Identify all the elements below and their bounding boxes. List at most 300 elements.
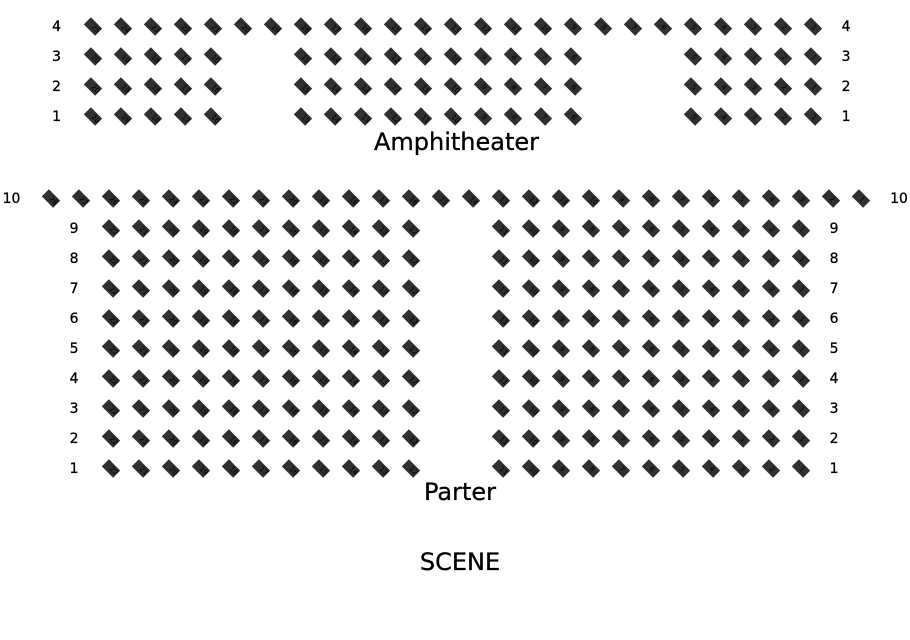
parter row 8 seats: 5 <box>677 255 686 264</box>
amphitheater row 2 seats: 7 <box>539 83 548 92</box>
parter row 7 seats: 19 <box>197 285 209 297</box>
parter row 7 seats: 12 <box>407 285 419 297</box>
parter row 2 seats: 1 <box>797 435 806 444</box>
amphitheater row 3 seats: 15 <box>299 53 311 65</box>
parter row 10 seats: 12 <box>527 195 539 207</box>
parter row 9 seats: 18 <box>227 225 239 237</box>
amphitheater row 1 seats <box>84 107 822 126</box>
parter row 1 seats: 6 <box>647 465 657 474</box>
amphitheater row 4 seats: 21 <box>209 23 221 35</box>
parter row 1 seats: 22 <box>107 465 119 477</box>
parter row 10 seats: 2 <box>827 195 836 204</box>
parter row 8 seats: 4 <box>707 255 717 264</box>
amphitheater row 1 seats: 13 <box>359 113 371 125</box>
amphitheater row 3 seats: 1 <box>809 53 818 62</box>
amphitheater row 2 seats: 20 <box>89 83 101 95</box>
parter row 10 seats: 21 <box>257 195 269 207</box>
heading: Amphitheater: Amphitheater <box>374 128 539 156</box>
amphitheater row 3 seats: 13 <box>359 53 371 65</box>
parter row 6 seats: 16 <box>287 315 300 327</box>
amphitheater row 4 seats: 4 <box>719 23 729 32</box>
parter row 6 seats: 3 <box>737 315 746 324</box>
parter row 10 seats: 24 <box>167 195 180 207</box>
parter row 7 seats: 18 <box>227 285 239 297</box>
parter row 3 seats: 14 <box>347 405 360 417</box>
parter row 4 seats: 13 <box>377 375 389 387</box>
section: amphitheater <box>84 17 822 126</box>
parter row 5 seats: 15 <box>317 345 329 357</box>
parter row 9 seats: 19 <box>197 225 209 237</box>
parter row 8 seats <box>102 249 810 268</box>
parter row 9 seats: 5 <box>677 225 686 234</box>
amphitheater row 1 seats: 1 <box>809 113 818 122</box>
amphitheater row 4 seats: 14 <box>419 23 432 35</box>
parter row 10 seats: 28 <box>47 195 59 207</box>
parter row 9 seats: 3 <box>737 225 746 234</box>
parter row 4 seats: 7 <box>617 375 626 384</box>
parter row 4 seats: 11 <box>497 375 509 387</box>
parter row 2 seats: 13 <box>377 435 389 447</box>
parter row 10 seats: 3 <box>797 195 806 204</box>
parter row 5 seats: 19 <box>197 345 209 357</box>
parter row 10 seats: 20 <box>287 195 299 207</box>
parter row 4 seats: 21 <box>137 375 149 387</box>
amphitheater row 3 seats: 6 <box>569 53 579 62</box>
parter row 9 seats: 17 <box>257 225 269 237</box>
parter row 1 seats: 11 <box>497 465 509 477</box>
parter row 5 seats: 7 <box>617 345 626 354</box>
parter row 7 seats: 4 <box>707 285 717 294</box>
parter row labels: 10 <box>3 191 20 207</box>
parter row 6 seats: 1 <box>797 315 806 324</box>
amphitheater row 3 seats <box>84 47 822 66</box>
amphitheater row 2 seats: 16 <box>209 83 222 95</box>
amphitheater row 3 seats: 2 <box>779 53 788 62</box>
parter row 4 seats: 16 <box>287 375 300 387</box>
parter row 2 seats: 6 <box>647 435 657 444</box>
parter row 1 seats: 4 <box>707 465 717 474</box>
parter row 7 seats: 22 <box>107 285 119 297</box>
parter row 2 seats: 14 <box>347 435 360 447</box>
amphitheater row 1 seats: 19 <box>119 113 131 125</box>
parter row 1 seats: 21 <box>137 465 149 477</box>
parter row 6 seats: 22 <box>107 315 119 327</box>
amphitheater row 4 seats: 22 <box>179 23 191 35</box>
parter row 3 seats: 1 <box>797 405 806 414</box>
parter row 3 seats: 15 <box>317 405 329 417</box>
parter row 4 seats <box>102 369 810 388</box>
amphitheater row 2 seats: 18 <box>149 83 161 95</box>
parter row 1 seats: 10 <box>527 465 539 477</box>
parter row 8 seats: 20 <box>167 255 179 267</box>
amphitheater row 3 seats: 11 <box>419 53 431 65</box>
parter row 5 seats: 22 <box>107 345 119 357</box>
parter row 10 seats: 15 <box>437 195 449 207</box>
parter row 4 seats: 18 <box>227 375 239 387</box>
parter row 8 seats: 19 <box>197 255 209 267</box>
parter row 6 seats: 19 <box>197 315 209 327</box>
parter row 6 seats: 17 <box>257 315 269 327</box>
parter row 3 seats: 18 <box>227 405 239 417</box>
parter row 8 seats: 6 <box>647 255 657 264</box>
amphitheater row 1 seats: 8 <box>509 113 518 122</box>
parter row 6 seats: 2 <box>767 315 776 324</box>
parter row 10 seats: 23 <box>197 195 209 207</box>
parter row 3 seats: 8 <box>587 405 596 414</box>
parter row 10 seats: 1 <box>857 195 866 204</box>
parter row 4 seats: 19 <box>197 375 209 387</box>
amphitheater row 1 seats: 4 <box>719 113 729 122</box>
parter row 2 seats: 21 <box>137 435 149 447</box>
parter row 5 seats: 20 <box>167 345 179 357</box>
amphitheater row 1 seats: 6 <box>569 113 579 122</box>
parter row labels: 9 <box>70 221 78 237</box>
amphitheater row 4 seats: 25 <box>89 23 101 35</box>
parter row 9 seats: 21 <box>137 225 149 237</box>
amphitheater row 1 seats: 20 <box>89 113 101 125</box>
parter row 2 seats: 18 <box>227 435 239 447</box>
parter row 1 seats: 17 <box>257 465 269 477</box>
parter row 6 seats: 21 <box>137 315 149 327</box>
parter row 7 seats: 17 <box>257 285 269 297</box>
parter row 2 seats: 5 <box>677 435 686 444</box>
amphitheater row 2 seats: 15 <box>299 83 311 95</box>
parter row 9 seats: 4 <box>707 225 717 234</box>
amphitheater row 2 seats: 1 <box>809 83 818 92</box>
parter row 1 seats: 15 <box>317 465 329 477</box>
amphitheater row 1 seats: 11 <box>419 113 431 125</box>
amphitheater row 2 seats: 17 <box>179 83 191 95</box>
parter row 1 seats: 20 <box>167 465 179 477</box>
parter row 7 seats: 21 <box>137 285 149 297</box>
parter row 8 seats: 13 <box>377 255 389 267</box>
parter row 4 seats: 12 <box>407 375 419 387</box>
parter row 5 seats: 17 <box>257 345 269 357</box>
parter row 10 seats: 14 <box>467 195 480 207</box>
parter row 1 seats: 1 <box>797 465 806 474</box>
parter row 5 seats: 13 <box>377 345 389 357</box>
amphitheater row 4 seats: 18 <box>299 23 311 35</box>
parter row 10 seats: 11 <box>557 195 569 207</box>
parter row labels: 8 <box>830 251 838 267</box>
amphitheater row 3 seats: 4 <box>719 53 729 62</box>
parter row 6 seats: 15 <box>317 315 329 327</box>
amphitheater row 1 seats: 16 <box>209 113 222 125</box>
parter row 10 seats: 8 <box>647 195 656 204</box>
parter row 7 seats: 1 <box>797 285 806 294</box>
parter row 8 seats: 2 <box>767 255 776 264</box>
parter row 2 seats: 11 <box>497 435 509 447</box>
parter row 8 seats: 9 <box>557 255 566 264</box>
parter row 8 seats: 11 <box>497 255 509 267</box>
parter row 7 seats: 16 <box>287 285 300 297</box>
amphitheater row 1 seats: 3 <box>749 113 758 122</box>
parter row 8 seats: 22 <box>107 255 119 267</box>
amphitheater row labels: 2 <box>842 79 850 95</box>
amphitheater row 1 seats: 14 <box>329 113 342 125</box>
parter row 4 seats: 17 <box>257 375 269 387</box>
parter row 10 seats: 6 <box>707 195 717 204</box>
parter row 1 seats: 2 <box>767 465 776 474</box>
amphitheater row 4 seats: 5 <box>689 23 698 32</box>
amphitheater row 3 seats: 7 <box>539 53 548 62</box>
amphitheater row 2 seats: 2 <box>779 83 788 92</box>
parter row 8 seats: 15 <box>317 255 329 267</box>
parter row 2 seats: 15 <box>317 435 329 447</box>
section: parter <box>42 189 870 478</box>
parter row 6 seats: 9 <box>557 315 566 324</box>
parter row 1 seats: 13 <box>377 465 389 477</box>
parter row labels: 7 <box>830 281 838 297</box>
parter row 9 seats: 20 <box>167 225 179 237</box>
parter row 6 seats: 20 <box>167 315 179 327</box>
parter row 10 seats: 19 <box>317 195 329 207</box>
parter row 4 seats: 20 <box>167 375 179 387</box>
parter row 4 seats: 8 <box>587 375 596 384</box>
amphitheater row 1 seats: 10 <box>449 113 461 125</box>
amphitheater row 4 seats: 23 <box>149 23 161 35</box>
parter row 5 seats: 4 <box>707 345 717 354</box>
parter row 8 seats: 21 <box>137 255 149 267</box>
amphitheater row 1 seats: 5 <box>689 113 698 122</box>
amphitheater row 4 seats: 17 <box>329 23 341 35</box>
amphitheater row labels: 1 <box>842 109 850 125</box>
parter row 10 seats: 13 <box>497 195 509 207</box>
amphitheater row 3 seats: 8 <box>509 53 518 62</box>
amphitheater row labels: 1 <box>52 109 61 125</box>
amphitheater row 2 seats: 4 <box>719 83 729 92</box>
amphitheater row 4 seats: 24 <box>119 23 132 35</box>
parter row 1 seats: 7 <box>617 465 626 474</box>
parter row 4 seats: 15 <box>317 375 329 387</box>
parter row 4 seats: 2 <box>767 375 776 384</box>
parter row 3 seats: 2 <box>767 405 776 414</box>
amphitheater row 3 seats: 5 <box>689 53 698 62</box>
parter row 1 seats: 16 <box>287 465 300 477</box>
parter row 3 seats: 13 <box>377 405 389 417</box>
amphitheater row 4 seats: 20 <box>239 23 251 35</box>
amphitheater row 3 seats: 17 <box>179 53 191 65</box>
parter row 4 seats: 14 <box>347 375 360 387</box>
parter row 4 seats: 1 <box>797 375 806 384</box>
parter row 7 seats: 15 <box>317 285 329 297</box>
amphitheater row 2 seats: 11 <box>419 83 431 95</box>
parter row 2 seats: 22 <box>107 435 119 447</box>
amphitheater row 2 seats: 10 <box>449 83 461 95</box>
amphitheater row 2 seats: 3 <box>749 83 758 92</box>
parter row 3 seats: 12 <box>407 405 419 417</box>
parter row 10 seats: 5 <box>737 195 746 204</box>
amphitheater row 4 seats: 2 <box>779 23 788 32</box>
amphitheater row 1 seats: 12 <box>389 113 401 125</box>
parter row 6 seats: 11 <box>497 315 509 327</box>
parter row 4 seats: 9 <box>557 375 566 384</box>
amphitheater row 4 seats: 7 <box>629 23 638 32</box>
parter row 10 seats: 9 <box>617 195 626 204</box>
parter row 6 seats: 6 <box>647 315 657 324</box>
amphitheater row 1 seats: 18 <box>149 113 161 125</box>
parter row 3 seats: 3 <box>737 405 746 414</box>
amphitheater row 4 seats: 8 <box>599 23 608 32</box>
parter row 6 seats: 12 <box>407 315 419 327</box>
amphitheater row 4 seats: 13 <box>449 23 461 35</box>
parter row 6 seats: 5 <box>677 315 686 324</box>
parter row 7 seats: 6 <box>647 285 657 294</box>
heading: SCENE: SCENE <box>420 548 500 576</box>
parter row 10 seats <box>42 189 870 208</box>
parter row 1 seats <box>102 459 810 478</box>
amphitheater row 2 seats: 5 <box>689 83 698 92</box>
parter row 1 seats: 12 <box>407 465 419 477</box>
parter row 9 seats: 13 <box>377 225 389 237</box>
parter row 2 seats: 19 <box>197 435 209 447</box>
parter row 2 seats: 2 <box>767 435 776 444</box>
parter row 3 seats <box>102 399 810 418</box>
parter row 10 seats: 10 <box>587 195 599 207</box>
parter row 2 seats: 9 <box>557 435 566 444</box>
parter row 7 seats: 9 <box>557 285 566 294</box>
amphitheater row 2 seats: 6 <box>569 83 579 92</box>
parter row 10 seats: 18 <box>347 195 359 207</box>
parter row 10 seats: 25 <box>137 195 149 207</box>
parter row 9 seats: 9 <box>557 225 566 234</box>
amphitheater row 2 seats: 19 <box>119 83 131 95</box>
parter row 10 seats: 16 <box>407 195 420 207</box>
parter row labels: 8 <box>70 251 78 267</box>
amphitheater row 4 seats: 11 <box>509 23 521 35</box>
amphitheater row 3 seats: 16 <box>209 53 222 65</box>
parter row labels <box>3 191 908 477</box>
parter row 10 seats: 7 <box>677 195 686 204</box>
parter row 8 seats: 17 <box>257 255 269 267</box>
amphitheater row 1 seats: 7 <box>539 113 548 122</box>
parter row 9 seats: 12 <box>407 225 419 237</box>
parter row 1 seats: 5 <box>677 465 686 474</box>
amphitheater row 2 seats: 14 <box>329 83 342 95</box>
parter row labels: 6 <box>70 311 78 327</box>
parter row 7 seats: 5 <box>677 285 686 294</box>
amphitheater row 4 seats: 3 <box>749 23 758 32</box>
parter row 1 seats: 8 <box>587 465 596 474</box>
parter row labels: 7 <box>70 281 78 297</box>
parter row 9 seats: 2 <box>767 225 776 234</box>
parter row 1 seats: 19 <box>197 465 209 477</box>
amphitheater row 3 seats: 19 <box>119 53 131 65</box>
amphitheater row labels: 4 <box>842 19 851 35</box>
parter row 1 seats: 9 <box>557 465 566 474</box>
parter row 8 seats: 3 <box>737 255 746 264</box>
parter row labels: 1 <box>830 461 838 477</box>
parter row 3 seats: 21 <box>137 405 149 417</box>
parter row labels: 5 <box>70 341 78 357</box>
parter row labels: 4 <box>830 371 839 387</box>
amphitheater row 3 seats: 20 <box>89 53 101 65</box>
parter row 7 seats: 10 <box>527 285 539 297</box>
amphitheater row 4 seats <box>84 17 822 36</box>
parter row 5 seats: 1 <box>797 345 806 354</box>
parter row 7 seats: 2 <box>767 285 776 294</box>
parter row 2 seats: 4 <box>707 435 717 444</box>
parter row 5 seats: 18 <box>227 345 239 357</box>
parter row 6 seats: 8 <box>587 315 596 324</box>
parter row 10 seats: 26 <box>107 195 120 207</box>
parter row 3 seats: 4 <box>707 405 717 414</box>
parter row 5 seats: 14 <box>347 345 360 357</box>
parter row 9 seats: 11 <box>497 225 509 237</box>
parter row 1 seats: 18 <box>227 465 239 477</box>
parter row 8 seats: 8 <box>587 255 596 264</box>
parter row 4 seats: 3 <box>737 375 746 384</box>
parter row labels: 1 <box>70 461 78 477</box>
parter row 5 seats: 10 <box>527 345 539 357</box>
amphitheater row 3 seats: 14 <box>329 53 342 65</box>
parter row labels: 9 <box>830 221 838 237</box>
parter row 9 seats: 1 <box>797 225 806 234</box>
parter row 5 seats: 9 <box>557 345 566 354</box>
parter row 2 seats: 12 <box>407 435 419 447</box>
parter row 5 seats: 3 <box>737 345 746 354</box>
parter row 10 seats: 17 <box>377 195 389 207</box>
parter row 5 seats <box>102 339 810 358</box>
parter row 2 seats: 10 <box>527 435 539 447</box>
parter row 4 seats: 5 <box>677 375 686 384</box>
parter row 7 seats: 14 <box>347 285 360 297</box>
parter row 2 seats: 20 <box>167 435 179 447</box>
parter row 10 seats: 22 <box>227 195 239 207</box>
parter row labels: 3 <box>830 401 838 417</box>
parter row 6 seats: 14 <box>347 315 360 327</box>
parter row 8 seats: 16 <box>287 255 300 267</box>
amphitheater row labels: 4 <box>52 19 61 35</box>
parter row 10 seats: 4 <box>767 195 777 204</box>
amphitheater row 3 seats: 3 <box>749 53 758 62</box>
amphitheater row labels: 2 <box>52 79 61 95</box>
parter row 9 seats: 6 <box>647 225 657 234</box>
parter row 1 seats: 3 <box>737 465 746 474</box>
parter row 5 seats: 11 <box>497 345 509 357</box>
parter row 3 seats: 19 <box>197 405 209 417</box>
amphitheater row 2 seats: 9 <box>479 83 488 92</box>
parter row 9 seats: 14 <box>347 225 360 237</box>
parter row 7 seats: 3 <box>737 285 746 294</box>
parter row 8 seats: 14 <box>347 255 360 267</box>
parter row labels: 2 <box>830 431 838 447</box>
amphitheater row 4 seats: 16 <box>359 23 372 35</box>
amphitheater row 3 seats: 12 <box>389 53 401 65</box>
parter row 4 seats: 22 <box>107 375 119 387</box>
amphitheater row 2 seats <box>84 77 822 96</box>
parter row 5 seats: 8 <box>587 345 596 354</box>
parter row 6 seats: 7 <box>617 315 626 324</box>
parter row 7 seats: 11 <box>497 285 509 297</box>
parter row 4 seats: 6 <box>647 375 657 384</box>
parter row 4 seats: 10 <box>527 375 539 387</box>
parter row 3 seats: 7 <box>617 405 626 414</box>
parter row 9 seats: 10 <box>527 225 539 237</box>
parter row 10 seats: 27 <box>77 195 89 207</box>
parter row 3 seats: 11 <box>497 405 509 417</box>
parter row 5 seats: 12 <box>407 345 419 357</box>
parter row 1 seats: 14 <box>347 465 360 477</box>
parter row 9 seats: 22 <box>107 225 119 237</box>
parter row 7 seats: 20 <box>167 285 179 297</box>
amphitheater row labels: 3 <box>842 49 850 65</box>
amphitheater row 4 seats: 6 <box>659 23 669 32</box>
parter row 5 seats: 6 <box>647 345 657 354</box>
parter row labels: 2 <box>70 431 78 447</box>
parter row 6 seats <box>102 309 810 328</box>
parter row 9 seats: 16 <box>287 225 300 237</box>
